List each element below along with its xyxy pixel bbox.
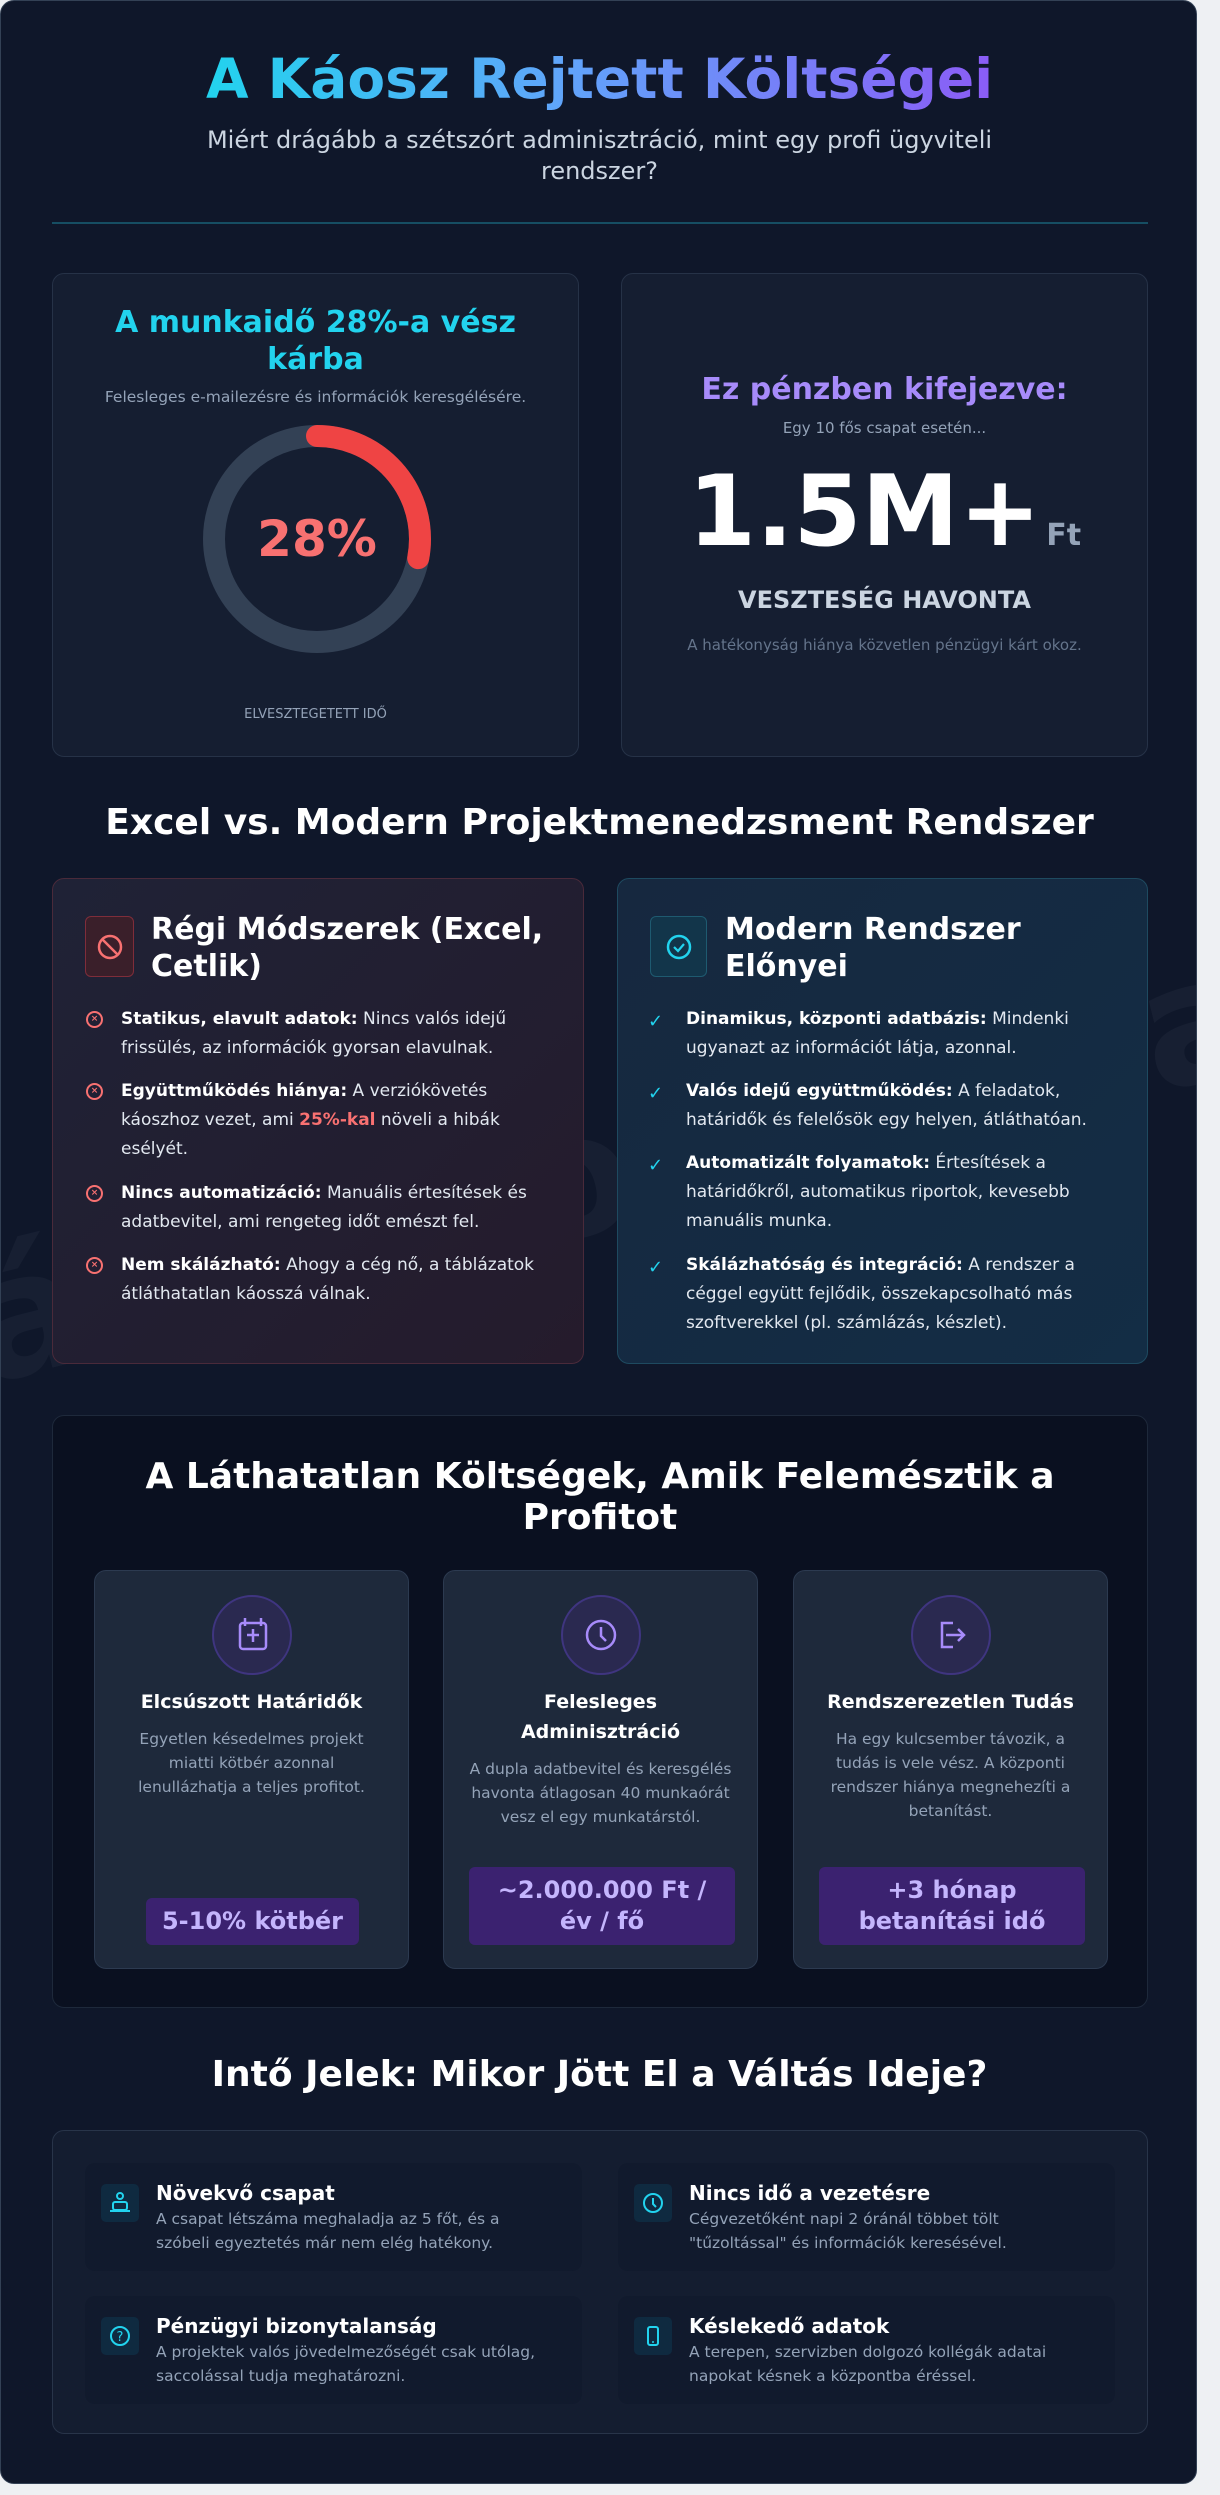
item: finance: A projektek valós jövedelmezőségét csak utólag, saccolással tudja meghatározni. [156, 2343, 535, 2385]
badge: 5-10% kötbér [162, 1907, 343, 1935]
big number: 1.5M+ Ft [688, 455, 1081, 569]
item: growing team [85, 2163, 582, 2271]
section heading: comparison: Excel vs. Modern Projektmenedzsment Rendszer [105, 802, 1094, 843]
panel: old methods: × [91, 1260, 98, 1270]
card: deadlines: Egyetlen késedelmes projekt miatti kötbér azonnal lenullázhatja a teljes profitot. [138, 1730, 365, 1796]
icon: exit [910, 1595, 990, 1675]
panel: old methods: Együttműködés hiánya: A verziókövetés káoszhoz vezet, ami 25%-kal növeli a hibák esélyét. [121, 1081, 500, 1159]
heading: A Láthatatlan Költségek, Amik Felemésztik a Profitot [145, 1456, 1055, 1538]
panel: money [621, 273, 1148, 757]
subtitle: Miért drágább a szétszórt adminisztráció, mint egy profi ügyviteli rendszer? [207, 126, 992, 185]
card: knowledge: Ha egy kulcsember távozik, a tudás is vele vész. A központi rendszer hiánya megnehezíti a betanítást. [831, 1730, 1070, 1820]
list items: Dinamikus, központi adatbázis: Mindenki ugyanazt az információt látja, azonnal. [686, 1009, 1069, 1058]
caption: ELVESZTEGETETT IDŐ [244, 707, 387, 722]
panel: money: Egy 10 fős csapat esetén... [783, 419, 986, 437]
panel: modern system [617, 878, 1148, 1364]
heading: A munkaidő 28%-a vész kárba [115, 305, 516, 377]
item: no time [618, 2163, 1115, 2271]
icon: clock [560, 1595, 640, 1675]
item: no time: Cégvezetőként napi 2 óránál többet tölt "tűzoltással" és információk keresésével. [689, 2210, 1007, 2252]
icon: ban [85, 916, 134, 977]
panel: modern system: Automatizált folyamatok: Értesítések a határidőkről, automatikus riportok, kevesebb manuális munka. [686, 1153, 1070, 1231]
panel: old methods: × [91, 1014, 98, 1024]
card: deadlines: Elcsúszott Határidők [141, 1691, 362, 1713]
item: finance: ? [117, 2330, 123, 2345]
panel: hidden costs [52, 1415, 1148, 2008]
panel: money: VESZTESÉG HAVONTA [738, 586, 1031, 614]
heading: Ez pénzben kifejezve: [701, 372, 1068, 407]
title: A Káosz Rejtett Költségei [206, 47, 993, 111]
icon: check circle [650, 916, 707, 977]
card: deadlines [94, 1570, 409, 1969]
panel: money: A hatékonyság hiánya közvetlen pénzügyi kárt okoz. [687, 636, 1082, 654]
panel: modern system: Valós idejű együttműködés: A feladatok, határidők és felelősök egy helyen, átláthatóan. [686, 1081, 1087, 1130]
panel: old methods: × [91, 1086, 98, 1096]
card: admin [443, 1570, 758, 1969]
badge: +3 hónap betanítási idő [859, 1876, 1045, 1935]
badge [146, 1898, 359, 1945]
card: knowledge [793, 1570, 1108, 1969]
panel: modern system: ✓ [648, 1011, 663, 1032]
panel: old methods: Nincs automatizáció: Manuális értesítések és adatbevitel, ami rengeteg időt emészt fel. [121, 1183, 527, 1232]
item: late data [618, 2296, 1115, 2404]
item: growing team: A csapat létszáma meghaladja az 5 főt, és a szóbeli egyeztetés már nem elég hatékony. [156, 2210, 500, 2252]
icon: calendar [212, 1595, 292, 1675]
section heading: warning signs: Intő Jelek: Mikor Jött El a Váltás Ideje? [212, 2054, 987, 2095]
panel: wasted time [52, 273, 579, 757]
card: admin: Felesleges Adminisztráció [521, 1691, 680, 1743]
panel: warning signs [52, 2130, 1148, 2434]
badge [819, 1867, 1085, 1945]
panel: old methods: Nem skálázható: Ahogy a cég nő, a táblázatok átláthatatlan káosszá válnak. [121, 1255, 534, 1304]
panel: modern system: ✓ [648, 1083, 663, 1104]
panel: modern system: Skálázhatóság és integráció: A rendszer a céggel együtt fejlődik, összekapcsolható más szoftverekkel (pl. számlázás, készlet). [686, 1255, 1075, 1333]
item: finance [85, 2296, 582, 2404]
item: late data: Késlekedő adatok [689, 2314, 889, 2338]
item: late data: A terepen, szervizben dolgozó kollégák adatai napokat késnek a központba éréssel. [689, 2343, 1046, 2385]
panel: old methods [52, 878, 584, 1364]
card: knowledge: Rendszerezetlen Tudás [827, 1691, 1074, 1713]
heading: Régi Módszerek (Excel, Cetlik) [151, 912, 543, 984]
card: admin: A dupla adatbevitel és keresgélés havonta átlagosan 40 munkaórát vesz el egy munkatárstól. [470, 1760, 731, 1826]
panel: modern system: ✓ [648, 1257, 663, 1278]
item: no time: Nincs idő a vezetésre [689, 2181, 930, 2205]
badge: ~2.000.000 Ft / év / fő [498, 1876, 706, 1935]
donut chart [203, 425, 431, 653]
heading: Modern Rendszer Előnyei [725, 912, 1021, 984]
panel: modern system: ✓ [648, 1155, 663, 1176]
list items: Statikus, elavult adatok: Nincs valós idejű frissülés, az információk gyorsan elavulnak. [121, 1009, 506, 1058]
item: growing team: Növekvő csapat [156, 2181, 335, 2205]
donut chart: 28% [257, 510, 377, 568]
badge [469, 1867, 735, 1945]
subtext: Felesleges e-mailezésre és információk keresgélésére. [105, 388, 526, 406]
item: finance: Pénzügyi bizonytalanság [156, 2314, 437, 2338]
panel: old methods: × [91, 1188, 98, 1198]
